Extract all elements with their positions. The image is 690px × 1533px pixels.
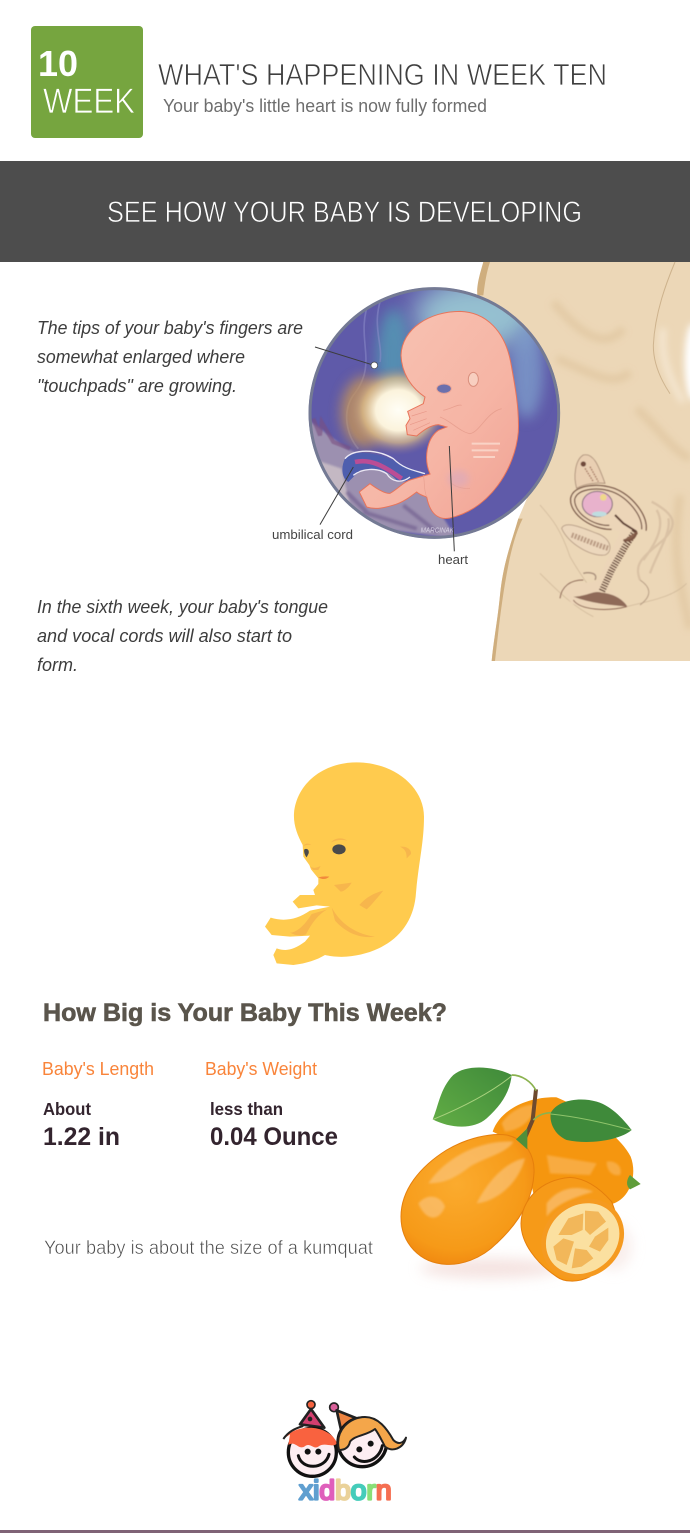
magnified embryo circle xyxy=(307,279,560,539)
week label: WEEK xyxy=(43,82,135,121)
fingers fact text xyxy=(37,318,303,396)
logo wordmark: xidborn xyxy=(299,1475,392,1506)
back kumquat xyxy=(493,1097,633,1204)
pointer line to umbilical cord xyxy=(320,467,353,525)
kumquat illustration xyxy=(401,1067,641,1295)
weight value: 0.04 Ounce xyxy=(210,1123,338,1151)
size comparison text: Your baby is about the size of a kumquat xyxy=(44,1238,374,1259)
logo: kidborn xyxy=(283,1401,406,1506)
pointer line to heart xyxy=(449,446,454,551)
artist signature: MARCINAK xyxy=(421,526,455,535)
tongue fact text xyxy=(37,597,328,675)
length value: 1.22 in xyxy=(43,1123,120,1151)
fingers fact text: somewhat enlarged where xyxy=(37,347,245,367)
umbilical cord label: umbilical cord xyxy=(272,527,353,542)
girl character xyxy=(330,1403,406,1467)
embryo figure xyxy=(359,311,518,518)
tongue fact text: and vocal cords will also start to xyxy=(37,626,292,646)
right leaf xyxy=(550,1099,632,1142)
umbilical cord xyxy=(342,453,425,482)
stem xyxy=(523,1089,536,1143)
length label: Baby's Length xyxy=(42,1059,154,1079)
title: WHAT'S HAPPENING IN WEEK TEN xyxy=(158,57,607,92)
week badge xyxy=(31,26,143,138)
fingers fact text: "touchpads" are growing. xyxy=(37,376,237,396)
heart label: heart xyxy=(438,552,468,567)
tongue fact text: form. xyxy=(37,655,78,675)
weight label: Baby's Weight xyxy=(205,1059,317,1079)
stat: baby's weight xyxy=(205,1059,338,1151)
icon: yellow baby silhouette xyxy=(265,762,424,965)
pointer line to fingers xyxy=(315,347,378,369)
banner heading: SEE HOW YOUR BABY IS DEVELOPING xyxy=(107,196,582,229)
boy character xyxy=(283,1401,337,1476)
footer bar xyxy=(0,1530,690,1533)
pregnant body illustration xyxy=(307,262,690,661)
fingers fact text: The tips of your baby's fingers are xyxy=(37,318,303,338)
length qualifier: About xyxy=(43,1099,91,1119)
section heading: how big: How Big is Your Baby This Week? xyxy=(43,999,447,1027)
week number: 10 xyxy=(38,43,78,84)
stat: baby's length xyxy=(42,1059,154,1151)
section banner xyxy=(0,161,690,262)
subtitle: Your baby's little heart is now fully formed xyxy=(163,96,487,116)
weight qualifier: less than xyxy=(210,1099,283,1119)
tongue fact text: In the sixth week, your baby's tongue xyxy=(37,597,328,617)
uterus anatomy detail xyxy=(540,455,687,617)
left leaf xyxy=(433,1067,512,1127)
front left kumquat xyxy=(401,1134,534,1264)
cut kumquat xyxy=(521,1177,640,1295)
